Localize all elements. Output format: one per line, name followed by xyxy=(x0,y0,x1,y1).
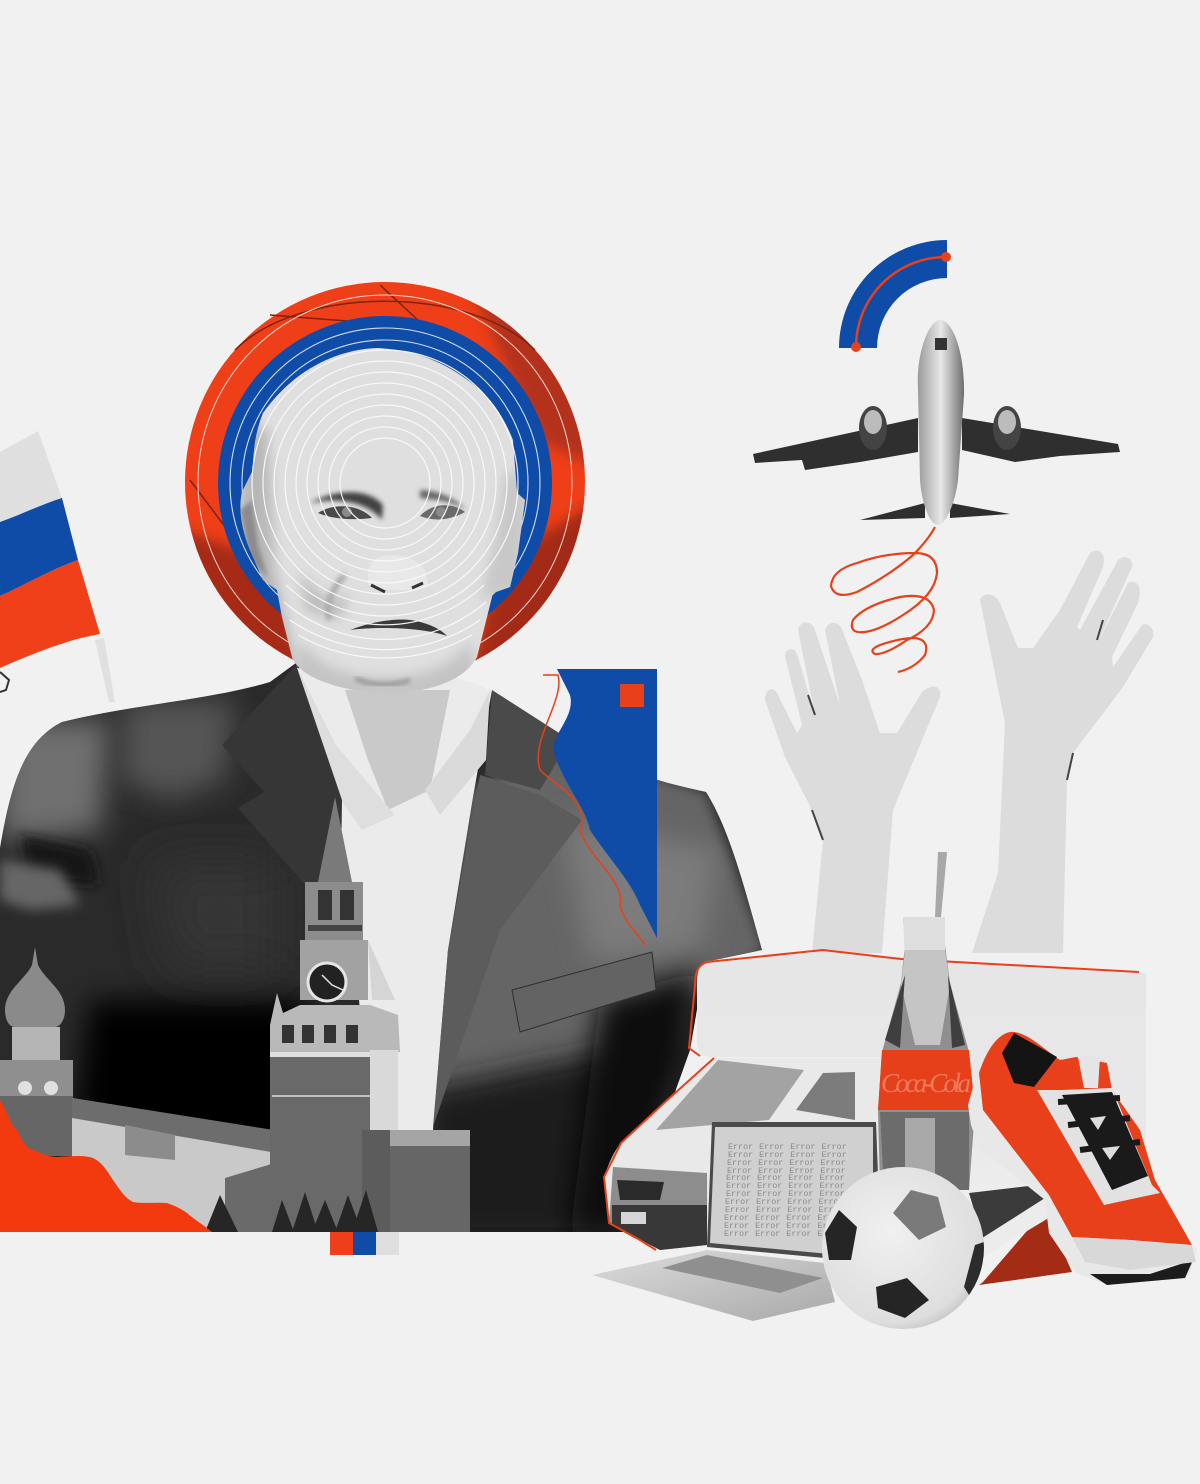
fir trees xyxy=(205,1190,378,1232)
mouth xyxy=(350,619,447,636)
laptop: Error Error Error Error xyxy=(728,1150,847,1160)
eyes xyxy=(318,506,372,519)
left hand xyxy=(765,622,940,953)
head and face xyxy=(240,348,530,700)
laptop: Error Error Error Error xyxy=(728,1142,847,1152)
camper van xyxy=(604,950,1146,1250)
cab xyxy=(604,1058,880,1240)
St Basil's Cathedral xyxy=(0,947,73,1156)
right jacket xyxy=(442,762,762,1102)
red wave bottom left xyxy=(0,1100,212,1232)
pocket xyxy=(512,952,656,1032)
sole xyxy=(968,1080,1197,1285)
red sneaker xyxy=(968,1032,1197,1285)
soda bottle with straw: Coca-Cola xyxy=(881,1068,971,1098)
sleeve and torso tones xyxy=(0,720,110,840)
laptop: Error Error Error Error xyxy=(724,1213,843,1223)
laptop xyxy=(592,1122,878,1321)
camper box xyxy=(697,952,1146,1240)
soda bottle with straw xyxy=(878,852,975,1190)
laces xyxy=(1062,1092,1148,1190)
toe cap xyxy=(1072,1237,1196,1270)
upper xyxy=(979,1032,1192,1245)
face shading xyxy=(240,420,300,680)
laptop: Error Error Error Error xyxy=(726,1173,845,1183)
right hand xyxy=(972,551,1153,953)
laptop: Error Error Error Error xyxy=(724,1221,843,1231)
suit jacket xyxy=(0,650,780,1250)
blue arc with red line xyxy=(839,240,951,352)
second sneaker behind xyxy=(969,1185,1072,1285)
soccer ball xyxy=(822,1167,990,1329)
laptop: Error Error Error Error xyxy=(724,1229,843,1239)
laptop: Error Error Error Error xyxy=(725,1205,844,1215)
laptop: Error Error Error Error xyxy=(726,1189,845,1199)
red spiral trail xyxy=(831,527,937,672)
clock xyxy=(308,963,346,1001)
Kremlin wall xyxy=(72,1098,470,1232)
eyestay xyxy=(1037,1088,1160,1205)
laptop: Error Error Error Error xyxy=(725,1197,844,1207)
halo: red and blue rings xyxy=(185,282,585,661)
Spasskaya tower xyxy=(270,797,400,1232)
airplane xyxy=(753,320,1120,525)
collar xyxy=(1002,1033,1057,1087)
lapels xyxy=(222,665,342,925)
flag: Russia xyxy=(0,431,115,702)
blue wavy shape with red square xyxy=(538,669,657,945)
collage illustration xyxy=(0,240,1196,1329)
nose xyxy=(368,555,428,590)
tricolour bars xyxy=(330,1232,399,1255)
laptop: Error Error Error Error xyxy=(727,1166,846,1176)
laptop: Error Error Error Error xyxy=(726,1181,845,1191)
concentric lines xyxy=(252,350,518,658)
laptop: Error Error Error Error xyxy=(727,1158,846,1168)
eyebrows xyxy=(310,492,383,520)
shirt xyxy=(296,668,492,1130)
